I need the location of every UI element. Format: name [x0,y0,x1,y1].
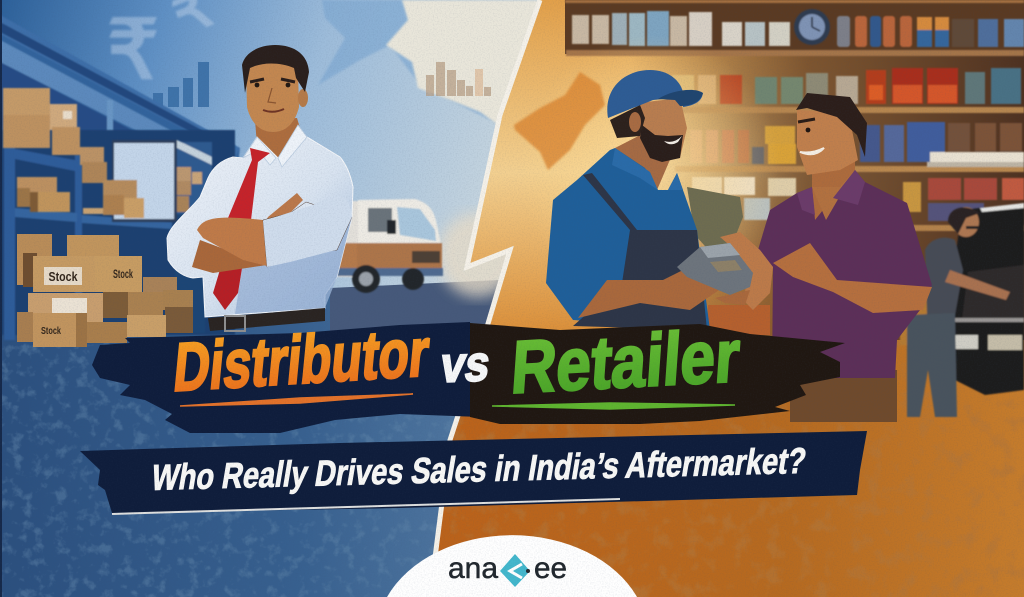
blue shirt [546,148,710,330]
panel: title banner left [92,322,480,433]
row 1 products [572,11,1024,47]
parts crate behind [687,187,743,255]
shop wall [565,0,1024,344]
beard [640,125,683,162]
logo suffix: ee [534,552,567,585]
road [330,280,498,330]
lower forearm [192,240,267,273]
overalls [573,173,707,330]
collar [243,125,307,167]
panel: subtitle banner [80,431,867,513]
face [638,98,687,160]
ground right [430,340,1024,597]
heading: vs: vs [437,335,494,393]
shopkeeper [715,93,932,422]
cap [607,70,703,118]
upper forearm [197,218,267,266]
heading: Distributor: Distributor [171,314,432,406]
belt [208,308,325,331]
upper shelf boxes [3,88,107,212]
face [797,110,858,175]
neck [255,118,300,160]
mechanic [546,70,722,330]
panel: title banner right [470,323,845,424]
trousers [790,370,897,422]
front stacked stock boxes [17,234,193,347]
diagnostic device [677,243,753,295]
blue bar chart [153,62,209,107]
collar [612,148,683,190]
subtitle: Who Really Drives Sales in India’s Aftermarket? [149,440,809,498]
gold wall [470,0,970,340]
shelves and products [565,0,1024,231]
logo diamond [500,554,530,587]
lower shop goods [708,305,770,335]
logo diamond notch [510,564,522,578]
ground texture [2,343,450,597]
shirt shadow [235,217,352,314]
lower tie [213,268,242,310]
underline: green [492,403,735,409]
forearm [578,263,722,318]
logo dot [526,569,530,573]
hair [796,93,867,157]
lower box label: Stock: Stock [41,326,61,337]
row 3 products [690,122,1024,167]
face [246,61,299,132]
divider: white lightning line [430,0,540,597]
distributor man [167,45,353,331]
panel: distributor scene [0,0,540,597]
sky background [2,0,538,290]
purple shirt [758,170,932,378]
rust texture [430,340,1024,597]
cap brim [658,90,703,106]
right sleeve [263,202,352,267]
hair [242,45,309,93]
neck [615,130,672,190]
icon: rupee symbols: ₹ [107,5,159,96]
ground left [2,290,456,597]
warm light glow [520,35,780,305]
row 2 products [672,68,1021,104]
warehouse shelving [0,130,235,340]
shirt [167,137,353,317]
underline: orange [180,394,413,406]
panel: retailer scene [430,0,1024,597]
box label: Stock: Stock [48,269,78,284]
distant haze [438,213,518,297]
box side label: Stock: Stock [113,267,133,281]
tan bar chart [426,62,491,96]
neck [812,150,855,220]
left edge strip [0,0,2,597]
pointing hand [720,232,773,310]
logo badge [387,535,637,597]
loading door panel [83,140,212,222]
gesturing arm [773,243,932,313]
clock [794,9,830,45]
map of India [318,0,540,125]
orange map [514,72,605,170]
icon: rupee symbols [109,0,214,80]
subtitle underline [112,499,620,514]
logo text: ana [448,552,498,585]
heading: Retailer: Retailer [509,314,742,409]
hair [610,105,645,138]
row 4 products [692,177,1024,221]
collar [797,170,865,215]
hand [267,193,303,219]
background mechanic and car [900,203,1024,417]
warehouse building [2,16,241,157]
delivery truck [337,199,443,293]
tie [228,148,270,220]
